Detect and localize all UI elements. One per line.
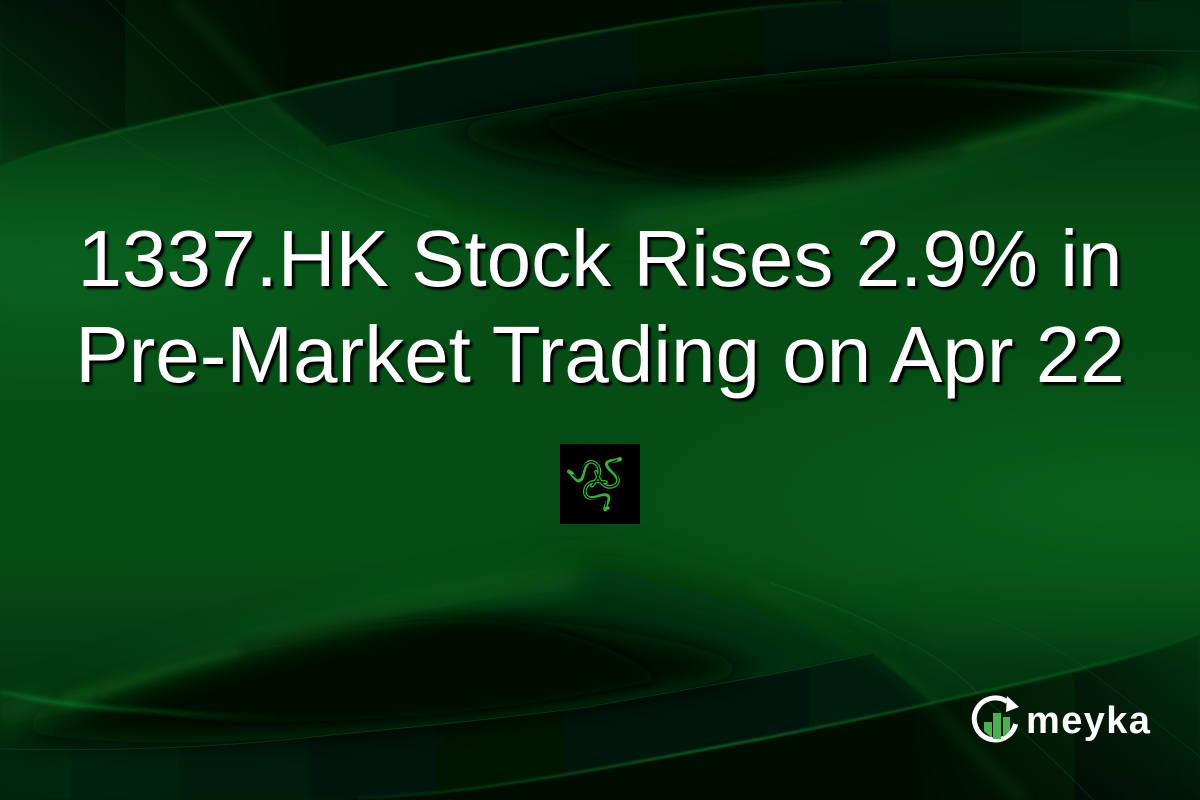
band between the two curves bbox=[268, 0, 1200, 147]
title: Pre-Market Trading on Apr 22 bbox=[75, 310, 1125, 399]
title bbox=[75, 214, 1125, 403]
soft shade under the lower-left of the swoosh bbox=[300, 93, 760, 235]
left streaks bbox=[107, 0, 429, 217]
icon: meyka circular arrow with bars bbox=[974, 696, 1019, 740]
wordmark: meyka bbox=[1026, 700, 1151, 742]
icon: company logo bbox=[560, 444, 640, 524]
glow band below the lens bbox=[620, 85, 1200, 222]
curve highlights bbox=[0, 2, 842, 167]
background: rotated copy of the swoosh at the bottom bbox=[0, 565, 1200, 800]
very dark area above the first curve bbox=[0, 0, 860, 167]
lens below the second curve bbox=[440, 58, 1190, 184]
title: 1337.HK Stock Rises 2.9% in bbox=[78, 214, 1122, 303]
brand: meyka logo bbox=[972, 695, 1151, 742]
